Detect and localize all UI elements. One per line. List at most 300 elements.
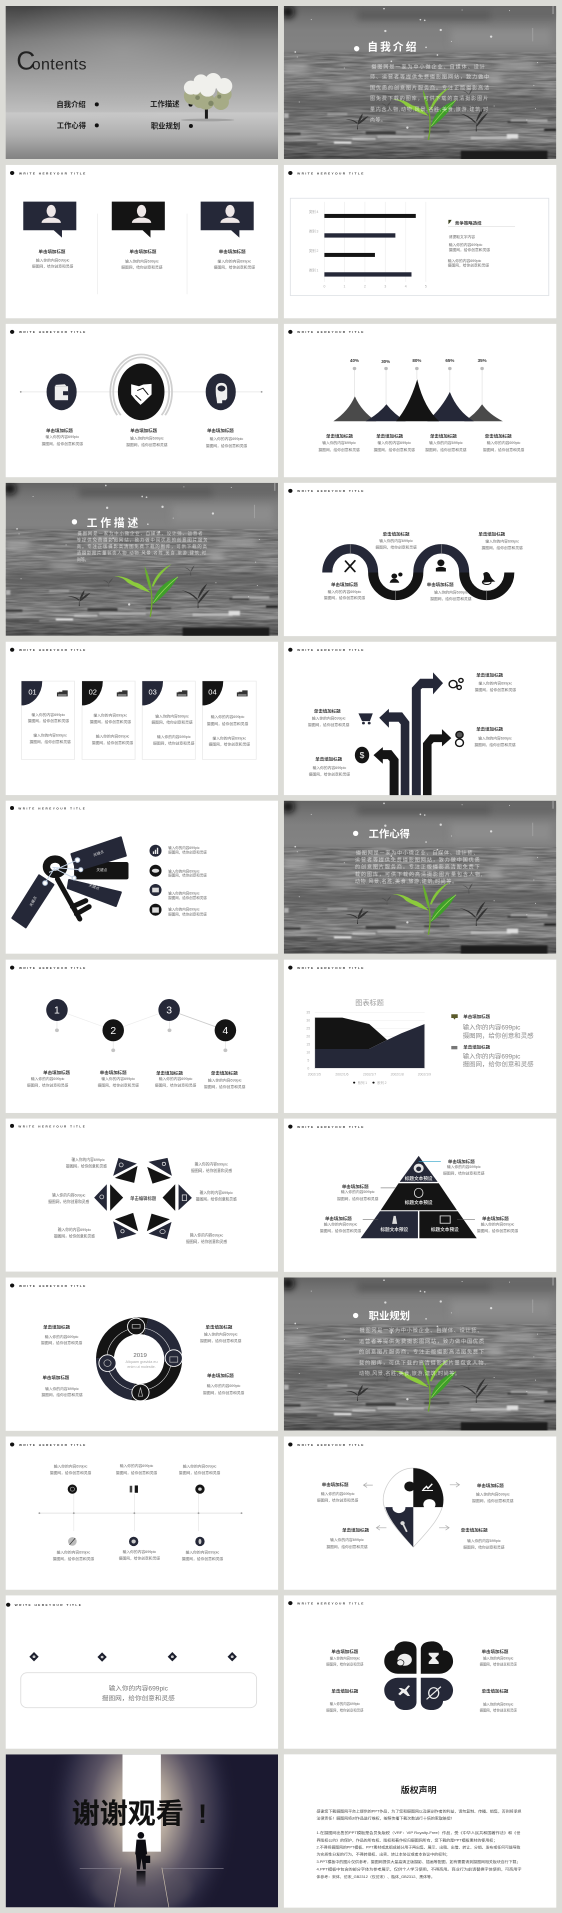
text block 1: 单击填加标题 — [43, 1069, 71, 1076]
mountain chart: 30% — [381, 359, 390, 364]
text block: 为实质性分发的行为，不得转授权、出卖、转让本协议或者本协议中的权利； — [317, 1852, 450, 1857]
text block 1: 摄图网，给你创意和灵感 — [50, 1470, 92, 1475]
text: top left: 摄图网，给你创意和灵感 — [66, 1164, 107, 1169]
text block: 4.PPT模板中包含的部分字体为参考展示，仅供个人学习使用，不得商用。商业行为前请替换字体使用，可商用字 — [317, 1866, 522, 1871]
header: WRITE HEREYOUR TITLE — [297, 1602, 363, 1606]
text: bottom left: 输入你的内容699pic — [58, 1227, 91, 1232]
panel: arrows — [284, 642, 556, 795]
text block 2 — [480, 1648, 518, 1667]
text block 2: 单击填加标题 — [476, 726, 504, 732]
text block 1: 输入你的内容699pic — [321, 1491, 355, 1496]
text block 1: 单击填加标题 — [476, 672, 504, 679]
header: WRITE HEREYOUR TITLE — [18, 1125, 85, 1129]
icon: head — [206, 374, 236, 410]
header: WRITE HEREYOUR TITLE — [19, 330, 85, 334]
menu: 工作描述 — [150, 99, 193, 108]
text rows: 摄图网，给你创意和灵感 — [168, 873, 207, 878]
panel: wave — [284, 483, 556, 636]
title: 版权声明 — [401, 1784, 437, 1795]
heading: Contents: ontents — [32, 56, 86, 73]
header: WRITE HEREYOUR TITLE — [297, 966, 363, 970]
text block 2: 单击填加标题 — [482, 1648, 509, 1655]
heading: Contents — [16, 45, 86, 75]
icon: crown — [150, 865, 162, 877]
arrow: navy up right — [412, 672, 443, 795]
panel: bar chart — [284, 165, 556, 318]
icon: money bag: $ — [360, 750, 365, 760]
panel: 自我介绍 photo — [281, 6, 558, 160]
text block 4: 输入你的内容699pic — [57, 1550, 90, 1554]
text block 2 — [474, 726, 516, 747]
pyramid — [361, 1156, 477, 1238]
text block 2 — [200, 1324, 242, 1343]
text block 3: 单击填加标题 — [342, 1527, 370, 1533]
callout 2: 输入你的内容699pic — [341, 1189, 375, 1194]
heading: 工作描述: 工作描述 — [87, 516, 139, 529]
card 02: 02 — [89, 688, 97, 697]
text block 1 — [317, 1481, 359, 1502]
bar chart: 4 — [405, 284, 407, 288]
icon: person bubble 3 — [201, 202, 254, 238]
ring diagram — [99, 1318, 182, 1401]
panel: clover — [284, 1595, 556, 1749]
text block: 清摄影图片量包含人物,动物,风景,名胜,美食,旅游,建筑,时 — [77, 549, 207, 556]
text: bottom right: 摄图网，给你创意和灵感 — [186, 1239, 227, 1244]
text block 2 — [472, 1482, 514, 1503]
text block — [370, 63, 489, 124]
text block: 3.PPT模板中的图片仅供参考，摄图网提供大量高清正版摄影、插画等配图，如有需要请到摄图网相关板块自行下载； — [317, 1859, 520, 1864]
text rows: 输入你的内容699pic — [168, 845, 200, 850]
legend item 1: 输入你的内容699pic — [463, 1024, 520, 1032]
menu: 职业规划 — [151, 121, 193, 130]
text block 2: 单击填加标题 — [100, 1069, 127, 1076]
text block: 商。专注正版摄影高清图免费下载的图库，可供下载的高 — [77, 543, 208, 550]
text rows: 输入你的内容699pic — [168, 868, 200, 873]
text block 5: 摄图网，给你创意和灵感 — [119, 1556, 160, 1560]
panel: four cards — [6, 642, 278, 795]
panel: ring — [6, 1278, 278, 1431]
title: 谢谢观看 — [72, 1798, 184, 1829]
ring diagram: Aliquam gravida eu — [125, 1360, 158, 1364]
legend item 2: 摄图网，给你创意和灵感 — [463, 1061, 534, 1069]
text: top right: 输入你的内容699pic — [195, 1162, 228, 1167]
text block — [77, 530, 208, 563]
text block 3: 摄图网，给你创意和灵感 — [324, 595, 366, 600]
text block 4 — [204, 1070, 246, 1089]
text rows — [168, 845, 207, 916]
bar chart: 1 — [344, 284, 346, 288]
text block: 1.在摄图网出售的PPT模板是会员免版税（VRF：VIP Royalty-Free）作品，受《中华人民共和国著作法》和《世 — [317, 1830, 521, 1835]
text block 3 — [214, 248, 255, 270]
header: WRITE HEREYOUR TITLE — [297, 330, 363, 334]
text block 3: 输入你的内容699pic — [330, 1701, 360, 1706]
illustration: keys and tags — [12, 837, 129, 927]
icon: tree — [181, 73, 234, 121]
card 02: 摄图网，给你创意和灵感 — [90, 719, 131, 724]
text block: 摄图网是一家为中小微企业、自媒体、设计 — [371, 63, 485, 70]
text block 4: 摄图网，给你创意和灵感 — [430, 596, 472, 601]
bar chart: 5 — [425, 284, 427, 288]
text block 2 — [121, 248, 163, 270]
text block 2: 摄图网，给你创意和灵感 — [482, 545, 523, 550]
text block 1: 摄图网，给你创意和灵感 — [41, 1340, 83, 1345]
step 3 — [158, 999, 180, 1021]
chart legend text: 摄图网，给你创意和灵感 — [449, 247, 490, 252]
panel: contents — [6, 6, 278, 159]
text block 1 — [326, 1648, 364, 1666]
text block 3 — [324, 581, 366, 600]
icon: diamond 2 — [97, 1652, 107, 1662]
text block 4: 摄图网，给你创意和灵感 — [480, 1708, 518, 1713]
text block 2: 单击填加标题 — [206, 1324, 233, 1330]
icon: gauges — [456, 731, 463, 746]
icon: diamond 4 — [228, 1652, 237, 1661]
text block 3: 输入你的内容699pic — [429, 440, 463, 445]
legend item 1: 摄图网，给你创意和灵感 — [463, 1032, 534, 1040]
icon: people — [390, 572, 403, 583]
card 04 — [202, 681, 256, 759]
text block 3 — [155, 1070, 197, 1088]
chart legend text: 摄图网，给你创意和灵感 — [448, 263, 489, 268]
text rows: 输入你的内容699pic — [168, 890, 200, 895]
icon: worker — [436, 559, 446, 571]
text block 3 — [41, 1374, 83, 1397]
text block 2: 输入你的内容699pic — [485, 539, 519, 543]
panel: speech bubbles — [6, 165, 278, 318]
panel: hexagon triangles — [6, 1119, 278, 1272]
icons — [68, 1484, 205, 1546]
text block 1: 摄图网，给你创意和灵感 — [32, 264, 74, 269]
text block 1 — [42, 427, 83, 446]
text: top right: 摄图网，给你创意和灵感 — [191, 1168, 232, 1173]
text block 3 — [308, 708, 350, 727]
header: WRITE HEREYOUR TITLE — [297, 171, 363, 175]
text block: 图免费下载的图库，可供下载的高清摄影图片 — [370, 95, 488, 102]
callout 2: 单击填加标题 — [342, 1183, 369, 1190]
text block 2 — [98, 1069, 139, 1088]
card 01: 01 — [28, 688, 37, 697]
text: left: 输入你的内容699pic — [52, 1193, 86, 1198]
text block 1: 输入你的内容699pic — [46, 434, 79, 439]
text block: 量内含人物,动物,风景,名胜,美食,旅游,建筑,时 — [370, 106, 488, 113]
chart legend text: 请提取文字内容 — [449, 234, 475, 239]
icon: wallet — [47, 374, 77, 410]
text block 1: 单击填加标题 — [46, 427, 74, 434]
wave chart — [327, 544, 509, 600]
area chart: 15 — [306, 1043, 310, 1047]
text block 4: 单击填加标题 — [315, 756, 343, 763]
pyramid: 标题文本预设 — [405, 1175, 433, 1182]
header: WRITE HEREYOUR TITLE — [18, 807, 85, 811]
text block 2: 摄图网，给你创意和灵感 — [474, 742, 516, 747]
menu: 自我介绍: 自我介绍 — [56, 100, 86, 109]
text block 2: 单击填加标题 — [130, 248, 157, 255]
card 03: 摄图网，给你创意和灵感 — [151, 720, 193, 725]
text block 4: 单击填加标题 — [211, 1070, 238, 1077]
callout 1 — [419, 1158, 485, 1176]
icon: bars — [150, 845, 162, 857]
illustration: keys and tags: 关键点 — [92, 849, 105, 857]
chart legend text: 竞争策略选择 — [455, 220, 482, 227]
text block 4: 摄图网，给你创意和灵感 — [463, 1545, 505, 1549]
text block 1: 摄图网，给你创意和灵感 — [326, 1662, 364, 1666]
text: top left — [66, 1157, 107, 1169]
text: top right — [191, 1162, 232, 1173]
step 2 — [102, 1019, 124, 1041]
text block 2 — [126, 427, 168, 447]
text block 1 — [318, 433, 360, 452]
text block 1: 输入你的内容699pic — [45, 1334, 79, 1339]
text block 2 — [374, 433, 415, 452]
text block 3: 单击填加标题 — [156, 1070, 184, 1077]
text block 1: 摄图网，给你创意和灵感 — [42, 441, 83, 446]
card 04: 输入你的内容699pic — [213, 736, 246, 740]
menu: 工作心得: 工作心得 — [57, 121, 86, 130]
text block 1: 摄图网，给你创意和灵感 — [317, 1498, 359, 1502]
legend item 1 — [451, 1013, 534, 1040]
text block 4 — [309, 756, 350, 777]
heading: 自我介绍: 自我介绍 — [367, 41, 417, 54]
text: left: 摄图网，给你创意和灵感 — [48, 1199, 90, 1204]
card 04: 输入你的内容699pic — [211, 714, 245, 719]
text block 3: 摄图网，给你创意和灵感 — [308, 722, 350, 727]
text block 3 — [206, 427, 248, 448]
text block: 动物,风景,名胜,美食,旅游,建筑,时尚等。 — [359, 1369, 460, 1377]
mountain chart: 65% — [445, 358, 454, 363]
text block 4 — [203, 1372, 245, 1395]
text block 2: 摄图网，给你创意和灵感 — [480, 1662, 518, 1667]
text block 3: 摄图网，给你创意和灵感 — [179, 1470, 221, 1475]
text block 4: 单击填加标题 — [427, 581, 454, 588]
text block 3: 摄图网，给你创意和灵感 — [326, 1544, 368, 1549]
text block 3: 输入你的内容699pic — [330, 1537, 364, 1542]
text block — [317, 1809, 522, 1879]
arrow — [363, 1483, 373, 1487]
legend item 1: 单击填加标题 — [463, 1013, 491, 1020]
chart legend text — [448, 220, 515, 268]
text block: 师、运营者等提供免费摄影图网站，致力做中 — [370, 74, 489, 81]
text block 4: 摄图网，给你创意和灵感 — [203, 1390, 245, 1395]
area chart — [306, 998, 431, 1085]
chart legend text: 输入你的内容699pic — [448, 258, 481, 263]
ring diagram: 2019 — [133, 1353, 147, 1359]
step 1 — [46, 999, 68, 1021]
header: WRITE HEREYOUR TITLE — [15, 1603, 81, 1607]
text block 4: 输入你的内容699pic — [434, 590, 468, 594]
text block 2: 摄图网，给你创意和灵感 — [98, 1083, 139, 1088]
card 03: 输入你的内容699pic — [157, 734, 191, 739]
text block 3: 摄图网，给你创意和灵感 — [41, 1392, 83, 1397]
callout 1: 摄图网，给你创意和灵感 — [443, 1171, 485, 1176]
card 02: 摄图网，给你创意和灵感 — [92, 740, 134, 745]
area chart: 图表标题 — [355, 998, 384, 1007]
person silhouette — [135, 1832, 150, 1888]
card 04: 摄图网，给你创意和灵感 — [207, 721, 249, 726]
card 04: 04 — [208, 688, 217, 697]
text block: 法律责任！摄图网将对作品进行维权，按照传播下载次数进行十倍的索取赔偿！ — [317, 1816, 454, 1821]
text block 2: 输入你的内容699pic — [120, 1463, 154, 1468]
legend item 2: 单击填加标题 — [463, 1043, 491, 1050]
text block 2: 输入你的内容699pic — [125, 258, 159, 263]
header: WRITE HEREYOUR TITLE — [19, 966, 85, 970]
clover diagram — [384, 1641, 453, 1710]
heading: 职业规划 — [353, 1310, 410, 1323]
timeline — [38, 1494, 242, 1531]
text block 2: 摄图网，给你创意和灵感 — [121, 265, 163, 270]
text: right — [196, 1190, 237, 1202]
text block 2: 单击填加标题 — [130, 427, 158, 434]
panel: numbered steps — [6, 960, 278, 1113]
text block 1 — [475, 672, 516, 692]
text box — [21, 1673, 257, 1708]
callout 4 — [457, 1215, 519, 1233]
text block: 等提供免费摄影图网站，致力做中国优质的创意图片服务 — [77, 536, 208, 543]
callout 3: 输入你的内容699pic — [324, 1222, 358, 1227]
bar chart: 类别 1 — [309, 267, 319, 272]
bar chart: 3 — [384, 284, 386, 288]
text block 1 — [32, 248, 74, 269]
callout 1: 单击填加标题 — [448, 1158, 475, 1165]
text block: 尚等。 — [370, 117, 386, 124]
card 01: 输入你的内容699pic — [33, 733, 67, 738]
area chart: 25 — [306, 1027, 310, 1031]
text block 3 — [425, 433, 467, 452]
bar chart: 类别 4 — [309, 209, 319, 214]
text block 1: 摄图网，给你创意和灵感 — [27, 1083, 69, 1088]
text block 2 — [116, 1463, 158, 1475]
header: WRITE HEREYOUR TITLE — [297, 648, 363, 652]
text block 3 — [326, 1688, 364, 1712]
bar chart — [290, 198, 549, 296]
icon: chat — [397, 1654, 412, 1666]
text block: 摄图网是一家为中小微企业、自媒体、设计师、运营者 — [77, 530, 203, 537]
text block 4: 输入你的内容699pic — [487, 440, 521, 445]
text block 3: 摄图网，给你创意和灵感 — [326, 1708, 364, 1712]
text block 1: 输入你的内容699pic — [479, 681, 512, 685]
mountain chart: 40% — [350, 358, 359, 363]
text block 4: 单击填加标题 — [482, 1688, 509, 1694]
step 4: 4 — [223, 1026, 229, 1037]
text block 2: 摄图网，给你创意和灵感 — [200, 1338, 242, 1343]
text block 3: 单击填加标题 — [331, 1688, 359, 1694]
bar chart: 类别 3 — [309, 228, 319, 233]
text block 4 — [53, 1550, 94, 1561]
panel: pyramid — [284, 1119, 556, 1272]
panel: thanks — [6, 1754, 278, 1908]
area chart: 35 — [306, 1011, 310, 1015]
text block 4 — [427, 581, 472, 601]
card 01 — [21, 681, 75, 759]
header: WRITE HEREYOUR TITLE — [19, 648, 85, 652]
area chart: 2002/1/6 — [335, 1072, 349, 1076]
text block 3: 输入你的内容699pic — [159, 1076, 193, 1081]
text: right: 摄图网，给你创意和灵感 — [196, 1197, 237, 1202]
icon: planet — [427, 1687, 441, 1699]
text rows: 摄图网，给你创意和灵感 — [168, 911, 207, 916]
text block 2: 单击填加标题 — [478, 531, 506, 537]
area chart: 0 — [307, 1066, 309, 1070]
icon: person bubble 2 — [112, 202, 165, 238]
text block — [355, 849, 482, 885]
menu: 工作描述: 工作描述 — [150, 99, 180, 108]
panel: mountain chart — [284, 324, 556, 477]
callout 2: 摄图网，给你创意和灵感 — [337, 1196, 379, 1201]
text block 3 — [179, 1464, 221, 1475]
bar chart: 2 — [364, 284, 366, 288]
text block: 2.不得将摄图网的PPT模板、PPT素材或其组成部分用于再出售、展示、出租、出借、转让、分销、发布或任何可能导致 — [317, 1844, 521, 1849]
text rows: 摄图网，给你创意和灵感 — [168, 850, 207, 855]
panel: rounded box — [6, 1595, 278, 1749]
text block 2: 输入你的内容699pic — [101, 1076, 135, 1081]
text block 2: 输入你的内容699pic — [377, 440, 411, 445]
text block 1: 输入你的内容699pic — [36, 257, 70, 262]
icon: gift — [150, 904, 162, 916]
icon: person bubble 1 — [23, 202, 76, 238]
text: top left: 输入你的内容699pic — [71, 1157, 105, 1162]
area chart: 2002/1/8 — [391, 1072, 404, 1076]
area chart: 30 — [306, 1019, 310, 1023]
text block 1: 输入你的内容699pic — [322, 440, 356, 445]
text block: 的创意图片服务商。专注正版摄影高清图免费下 — [355, 864, 480, 871]
text block 3: 输入你的内容699pic — [328, 589, 361, 594]
card 03: 输入你的内容699pic — [155, 714, 189, 718]
illustration: keys and tags: 关键点 — [96, 867, 108, 872]
text block: 摄图网是一家为中小微企业、自媒体、设计师、 — [360, 1326, 482, 1334]
icon: diamond 1 — [29, 1652, 39, 1661]
arrow: black left — [374, 747, 399, 795]
icon: handshake — [110, 354, 172, 420]
legend item 2: 输入你的内容699pic — [463, 1053, 520, 1060]
hexagon diagram: 单击编辑标题 — [130, 1195, 157, 1202]
pyramid: 标题文本预设 — [431, 1226, 459, 1233]
text block 4: 输入你的内容699pic — [207, 1383, 241, 1388]
text block 3: 单击填加标题 — [430, 433, 457, 439]
arrow — [450, 1482, 460, 1487]
panel: timeline — [6, 1436, 278, 1590]
text block 4: 输入你的内容699pic — [313, 765, 346, 770]
text block 1: 单击填加标题 — [383, 531, 410, 537]
text block 1 — [41, 1324, 83, 1345]
panel: 工作描述 photo — [3, 483, 279, 637]
text block 2: 输入你的内容699pic — [478, 736, 512, 740]
text block 4: 摄图网，给你创意和灵感 — [309, 772, 350, 777]
pyramid: 标题文本预设 — [380, 1226, 409, 1233]
text: right: 输入你的内容699pic — [200, 1190, 233, 1195]
text block 3: 输入你的内容699pic — [210, 436, 243, 441]
text block: 的创意图片服务商。专注正版摄影高清图免费下 — [359, 1348, 484, 1356]
area chart: 5 — [307, 1059, 309, 1063]
chart legend text: 输入你的内容699pic — [449, 242, 483, 247]
area chart: 20 — [306, 1035, 310, 1039]
text block 3: 单击填加标题 — [331, 581, 359, 588]
text block 1 — [50, 1464, 92, 1475]
card 01: 摄图网，给你创意和灵感 — [29, 739, 71, 744]
text block 1: 输入你的内容699pic — [54, 1464, 88, 1468]
heading: 工作心得: 工作心得 — [369, 827, 410, 840]
text block 5 — [119, 1549, 160, 1560]
text block 6: 摄图网，给你创意和灵感 — [182, 1556, 223, 1561]
arrow: black right — [423, 729, 451, 795]
icon: money bag — [355, 747, 369, 763]
text block 4: 摄图网，给你创意和灵感 — [204, 1084, 246, 1089]
text block 1: 摄图网，给你创意和灵感 — [375, 545, 417, 549]
text block 1: 输入你的内容699pic — [379, 538, 413, 543]
icon: bell — [482, 572, 495, 584]
text block 4: 输入你的内容699pic — [483, 1702, 514, 1706]
text block 2: 摄图网，给你创意和灵感 — [126, 442, 168, 447]
icon: diamond 3 — [168, 1652, 177, 1661]
icon: tools — [345, 561, 355, 571]
